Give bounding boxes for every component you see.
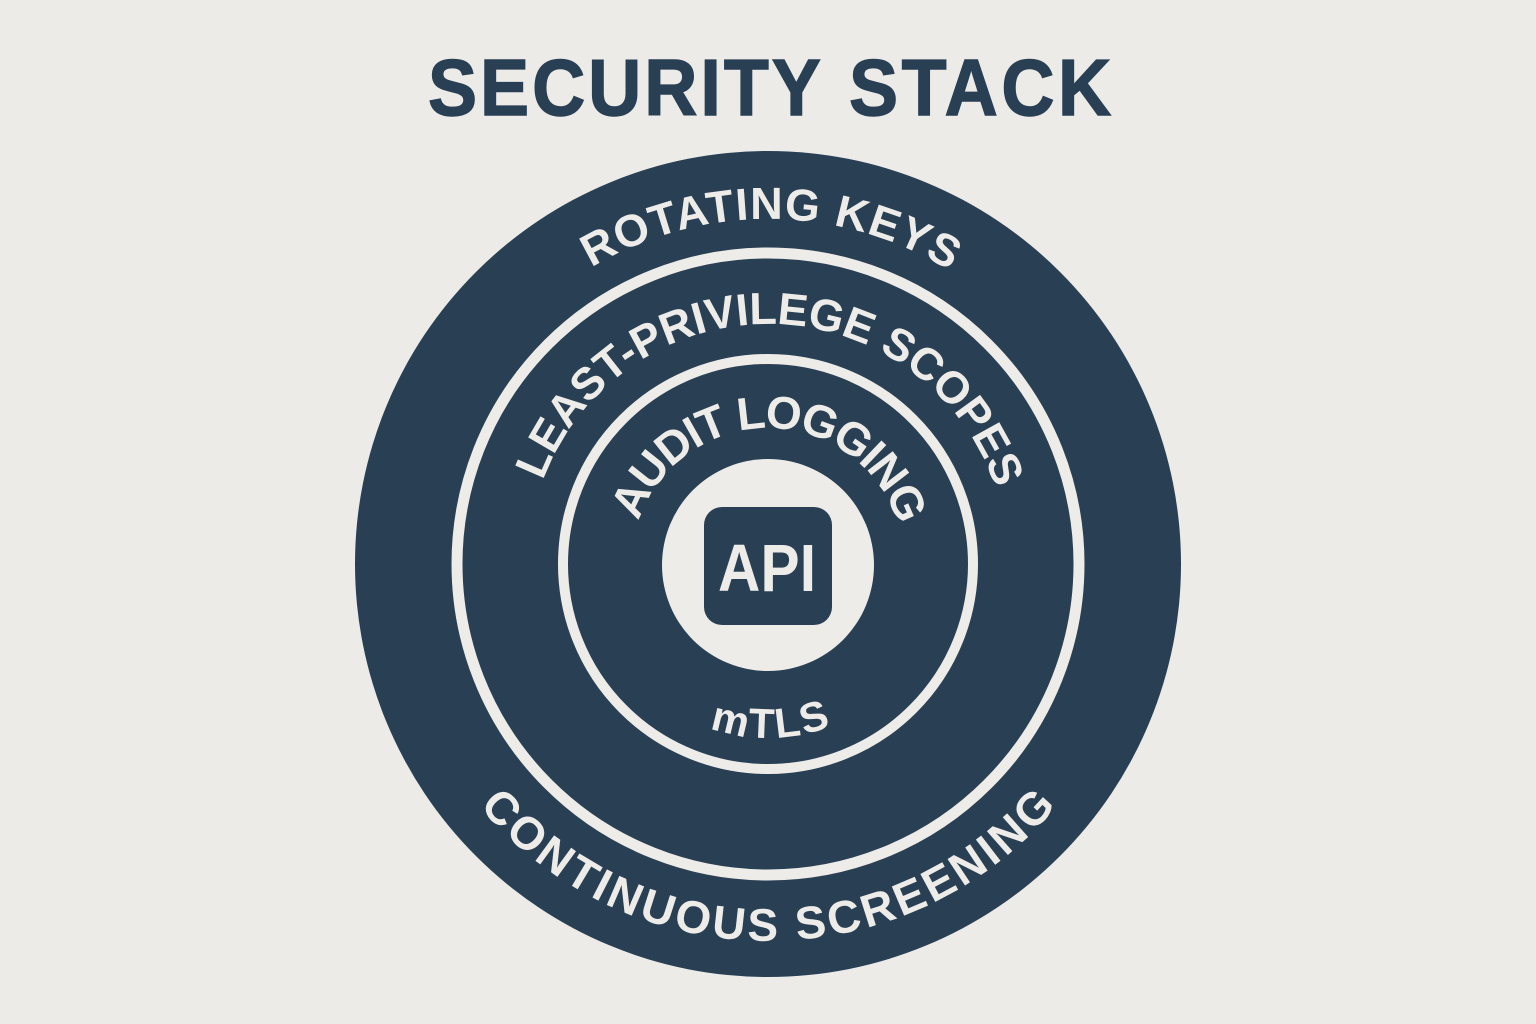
- diagram: concentric security layers: [355, 151, 1181, 977]
- ring: second layer: [457, 253, 1079, 875]
- label: least-privilege scopes: LEAST-PRIVILEGE SCOPES: [515, 293, 1022, 484]
- outer layer disc: [355, 151, 1181, 977]
- API label: API: [718, 531, 816, 606]
- label: audit logging: AUDIT LOGGING: [614, 396, 924, 521]
- ring: third layer: [563, 359, 973, 769]
- core circle: [662, 459, 874, 671]
- title: STACK: [849, 43, 1111, 133]
- label: mTLS: mTLS: [712, 702, 828, 738]
- icon: API core: [662, 459, 874, 671]
- label: rotating keys: ROTATING KEYS: [579, 188, 960, 266]
- label: continuous screening: CONTINUOUS SCREENING: [486, 792, 1052, 942]
- title: SECURITY: [428, 43, 821, 133]
- title: [428, 43, 1111, 133]
- API badge: [704, 507, 832, 625]
